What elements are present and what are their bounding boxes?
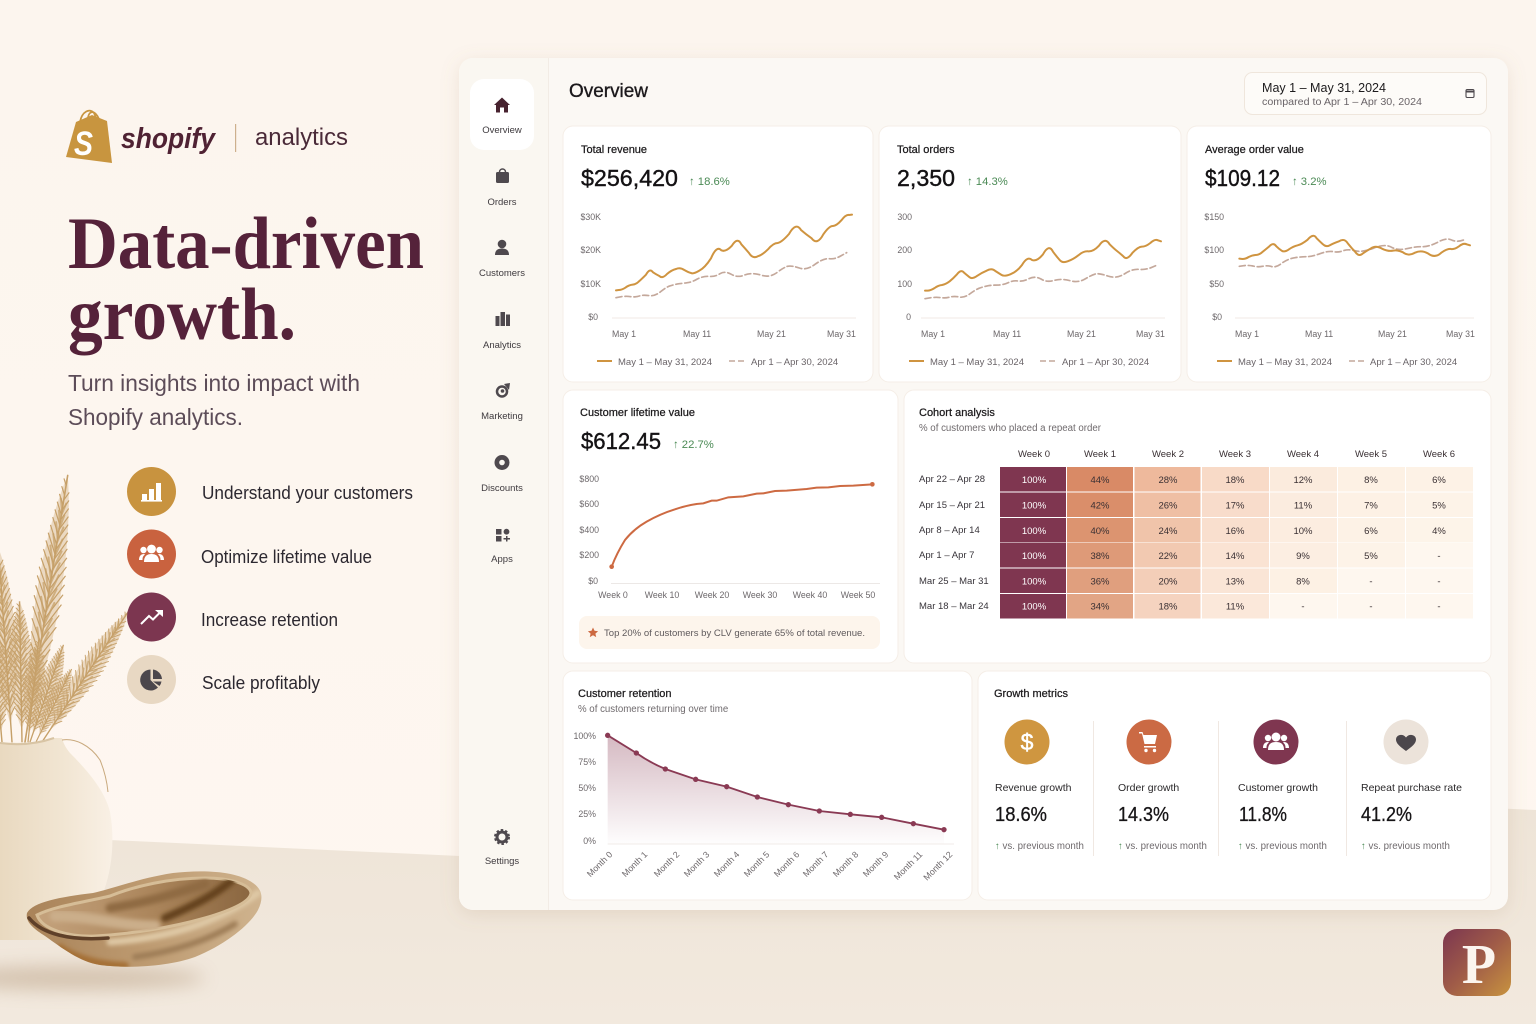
subtitle: Shopify analytics. [68,404,243,430]
card: average order value: $109.12 [1205,165,1280,191]
icon: shopify bag [66,111,112,163]
x axis labels: Month 0 [585,849,614,879]
heatmap values: 100% [1022,551,1047,562]
decorative vase [0,738,112,940]
y axis labels: 100 [897,279,912,289]
y axis labels: $0 [1212,312,1222,322]
y axis labels: 300 [897,212,912,222]
x axis labels: May 31 [1446,329,1475,339]
metric: repeat purchase rate [1361,720,1462,852]
metric: revenue growth: ↑ vs. previous month [995,841,1084,852]
sidebar [459,58,549,910]
heatmap values: 18% [1225,475,1245,486]
x axis labels: Month 7 [801,849,830,879]
card: customer lifetime value: Customer lifetime value [580,407,695,419]
nav: settings: Settings [485,856,519,867]
metric: revenue growth: 18.6% [995,804,1047,826]
date range picker: May 1 – May 31, 2024 [1262,81,1386,95]
y axis labels: $150 [1204,212,1224,222]
y axis labels: $800 [579,474,599,484]
y axis labels: $0 [588,312,598,322]
line chart: lifetime value [609,482,875,569]
x axis labels: May 31 [1136,329,1165,339]
card: cohort analysis [904,390,1491,663]
x axis labels: May 1 [1235,329,1259,339]
heatmap values: 6% [1432,475,1446,486]
column headers: Week 4 [1287,449,1319,460]
callout: Top 20% of customers by CLV generate 65% of total revenue. [604,628,865,639]
y axis labels: 0 [906,312,911,322]
heatmap values: 100% [1022,475,1047,486]
x axis labels: May 21 [1378,329,1407,339]
metric: customer growth: Customer growth [1238,782,1318,794]
heatmap values: 26% [1158,500,1178,512]
nav: analytics: Analytics [483,340,521,351]
heatmap values: 36% [1090,576,1110,588]
x axis labels: Month 12 [921,849,954,882]
heatmap values: 5% [1364,551,1378,562]
y axis labels [574,731,596,846]
x axis labels [598,590,875,600]
subtitle: Turn insights into impact with [68,370,360,396]
x axis labels: Month 5 [742,849,771,879]
x axis labels: Week 0 [598,590,628,600]
x axis labels [921,329,1165,339]
y axis labels: $10K [580,279,601,289]
heatmap cells [1000,467,1473,618]
heatmap values: 11% [1294,500,1313,512]
heatmap values: 100% [1022,526,1047,537]
heatmap values: 17% [1225,500,1245,512]
benefit: increase retention: Increase retention [201,610,338,630]
heatmap values: 9% [1296,551,1310,562]
nav: marketing: Marketing [481,411,523,422]
metric: order growth [1118,720,1207,852]
row labels: Mar 25 – Mar 31 [919,576,989,587]
y axis labels: $50 [1209,279,1224,289]
x axis labels [612,329,856,339]
column headers: Week 2 [1152,449,1184,460]
y axis labels: 100% [574,731,596,741]
line chart: average order value [1239,236,1470,267]
metric: repeat purchase rate: ↑ vs. previous month [1361,841,1450,852]
card: customer lifetime value [563,390,898,663]
nav: overview: Overview [482,125,522,136]
table surface [0,808,1536,1024]
y axis labels: $100 [1204,245,1224,255]
metric: order growth: ↑ vs. previous month [1118,841,1207,852]
benefit: increase retention [127,592,338,642]
x axis labels: Month 8 [831,849,860,879]
card: total revenue: ↑ 18.6% [689,176,730,188]
y axis labels: $30K [580,212,601,222]
x axis labels: Month 2 [652,849,681,879]
legend: May 1 – May 31, 2024 [930,357,1024,368]
brand badge [1443,929,1511,996]
nav: discounts [481,455,523,494]
y axis labels [579,474,599,586]
x axis labels: Month 9 [861,849,890,879]
metric: repeat purchase rate: 41.2% [1361,804,1412,826]
heatmap values: 12% [1293,475,1313,486]
benefit: scale profitably: Scale profitably [202,673,320,693]
card: total revenue: Total revenue [581,144,647,156]
date range picker: compared to Apr 1 – Apr 30, 2024 [1262,96,1422,108]
decorative wooden bowl [0,871,261,990]
x axis labels: Week 40 [793,590,827,600]
brand badge: P [1462,934,1496,996]
metric: revenue growth: $ [1021,729,1034,755]
heatmap values: 8% [1296,576,1310,588]
column headers: Week 3 [1219,449,1251,460]
metric: order growth: Order growth [1118,782,1179,794]
column headers: Week 5 [1355,449,1387,460]
nav: overview [470,79,534,150]
legend [597,357,838,368]
column headers: Week 0 [1018,449,1050,460]
card: customer retention [563,671,972,900]
subtitle [68,370,360,430]
heatmap values: 100% [1022,500,1047,512]
heatmap values: 44% [1090,475,1110,486]
heatmap values: 28% [1158,475,1178,486]
card: total orders: 2,350 [897,165,955,191]
y axis labels: $20K [580,245,601,255]
row labels: Mar 18 – Mar 24 [919,601,989,612]
y axis labels: 0% [583,836,596,846]
metric: repeat purchase rate: Repeat purchase rate [1361,782,1462,794]
column headers [1018,449,1455,460]
nav: orders [487,169,517,208]
card: growth metrics: Growth metrics [994,688,1068,700]
card: customer retention: Customer retention [578,688,672,700]
metric: customer growth: ↑ vs. previous month [1238,841,1327,852]
y axis labels: 50% [578,783,596,793]
metric: revenue growth [995,720,1084,852]
heatmap values: 5% [1432,500,1446,512]
nav: analytics [483,312,521,351]
legend: Apr 1 – Apr 30, 2024 [1370,357,1457,368]
card: growth metrics [978,671,1491,900]
row labels [919,474,989,612]
legend: Apr 1 – Apr 30, 2024 [1062,357,1149,368]
y axis labels: 200 [897,245,912,255]
card: cohort analysis: Cohort analysis [919,407,995,419]
heading: overview: Overview [569,81,648,102]
heatmap values: 18% [1158,602,1178,612]
x axis labels: Week 50 [841,590,875,600]
metric: revenue growth: Revenue growth [995,782,1072,794]
heatmap values: 8% [1364,475,1378,486]
x axis labels: May 1 [612,329,636,339]
metric: order growth: 14.3% [1118,804,1169,826]
decorative pampas grass [0,473,138,749]
legend: May 1 – May 31, 2024 [618,357,712,368]
heatmap values: 11% [1226,602,1245,612]
heatmap values: - [1301,602,1305,612]
heatmap values: 42% [1090,500,1110,512]
y axis labels: $400 [579,525,599,535]
x axis labels: Week 20 [695,590,729,600]
x axis labels: May 21 [757,329,786,339]
heatmap values: - [1437,576,1441,588]
heatmap values: 24% [1158,526,1178,537]
heatmap values: - [1437,602,1441,612]
row labels: Apr 22 – Apr 28 [919,474,985,485]
card: average order value [1187,126,1491,382]
card: customer lifetime value: $612.45 [581,428,661,454]
dashboard panel [459,58,1508,910]
wordmark: shopify [121,123,217,155]
x axis labels: May 1 [921,329,945,339]
nav: apps: Apps [491,554,513,565]
heatmap values: - [1369,576,1373,588]
nav: discounts: Discounts [481,483,523,494]
x axis labels: Month 11 [892,849,924,882]
title: growth. [68,274,296,356]
x axis labels: May 21 [1067,329,1096,339]
y axis labels: $200 [579,550,599,560]
heatmap values: 6% [1364,526,1378,537]
benefit: scale profitably [127,655,320,704]
heatmap values: 34% [1090,602,1110,612]
icon: shopify bag: S [74,125,93,163]
brand logo [66,111,348,163]
legend [1217,357,1457,368]
x axis labels: May 11 [683,329,711,339]
heatmap values: 100% [1022,602,1047,612]
x axis labels: Month 3 [682,849,711,879]
card: total revenue [563,126,873,382]
nav: customers [479,240,525,279]
y axis labels [897,212,912,322]
nav: orders: Orders [487,197,517,208]
x axis labels: Month 6 [772,849,801,879]
column headers: Week 6 [1423,449,1455,460]
line chart: orders [925,240,1161,299]
x axis labels: May 31 [827,329,856,339]
x axis labels: Month 4 [712,849,741,879]
x axis labels: May 11 [993,329,1021,339]
card: total orders [879,126,1181,382]
heatmap values: 40% [1090,526,1110,537]
nav: apps [491,529,513,565]
heatmap values: 38% [1090,551,1110,562]
x axis labels [585,849,954,882]
icon: calendar [1466,90,1474,98]
y axis labels: 25% [578,809,596,819]
title: Data-driven [68,203,424,285]
card: total orders: ↑ 14.3% [967,176,1008,188]
benefit: understand your customers [127,467,413,516]
callout [579,616,880,649]
x axis labels: Week 30 [743,590,777,600]
heatmap values: 4% [1432,526,1446,537]
heatmap values: 100% [1022,576,1047,588]
line chart: revenue [616,215,852,298]
legend: May 1 – May 31, 2024 [1238,357,1332,368]
y axis labels: 75% [578,757,596,767]
area chart: retention [605,733,954,844]
metric: customer growth [1238,720,1327,852]
column headers: Week 1 [1084,449,1116,460]
heatmap values: 20% [1158,576,1178,588]
metric: customer growth: 11.8% [1239,804,1287,826]
x axis labels: Month 1 [620,849,649,879]
heatmap values: 10% [1293,526,1313,537]
x axis labels: Week 10 [645,590,679,600]
nav: marketing [481,383,523,422]
card: customer lifetime value: ↑ 22.7% [673,439,714,451]
heatmap values: - [1437,551,1441,562]
x axis labels: May 11 [1305,329,1333,339]
nav: customers: Customers [479,268,525,279]
nav: settings [485,830,519,867]
x axis labels [1235,329,1475,339]
heatmap values: 22% [1158,551,1178,562]
row labels: Apr 15 – Apr 21 [919,500,985,511]
heatmap values: 7% [1364,500,1378,512]
benefit: optimize lifetime value [127,530,372,578]
benefit: optimize lifetime value: Optimize lifetime value [201,547,372,567]
card: cohort analysis: % of customers who placed a repeat order [919,423,1102,434]
heatmap values: 13% [1225,576,1245,588]
y axis labels [580,212,601,322]
heatmap values: - [1369,602,1373,612]
card: average order value: ↑ 3.2% [1292,176,1327,188]
date range picker [1244,72,1486,114]
heatmap values: 16% [1225,526,1245,537]
card: customer retention: % of customers returning over time [578,704,728,715]
benefit: understand your customers: Understand your customers [202,483,413,503]
y axis labels [1204,212,1224,322]
row labels: Apr 8 – Apr 14 [919,525,980,536]
card: total revenue: $256,420 [581,165,678,191]
legend [909,357,1149,368]
product name: analytics [255,124,348,151]
y axis labels: $0 [588,576,598,586]
y axis labels: $600 [579,499,599,509]
card: average order value: Average order value [1205,144,1304,156]
heatmap values [1022,475,1446,612]
legend: Apr 1 – Apr 30, 2024 [751,357,838,368]
benefits list [127,467,413,704]
row labels: Apr 1 – Apr 7 [919,550,974,561]
title [68,203,424,356]
card: total orders: Total orders [897,144,955,156]
heatmap values: 14% [1225,551,1245,562]
